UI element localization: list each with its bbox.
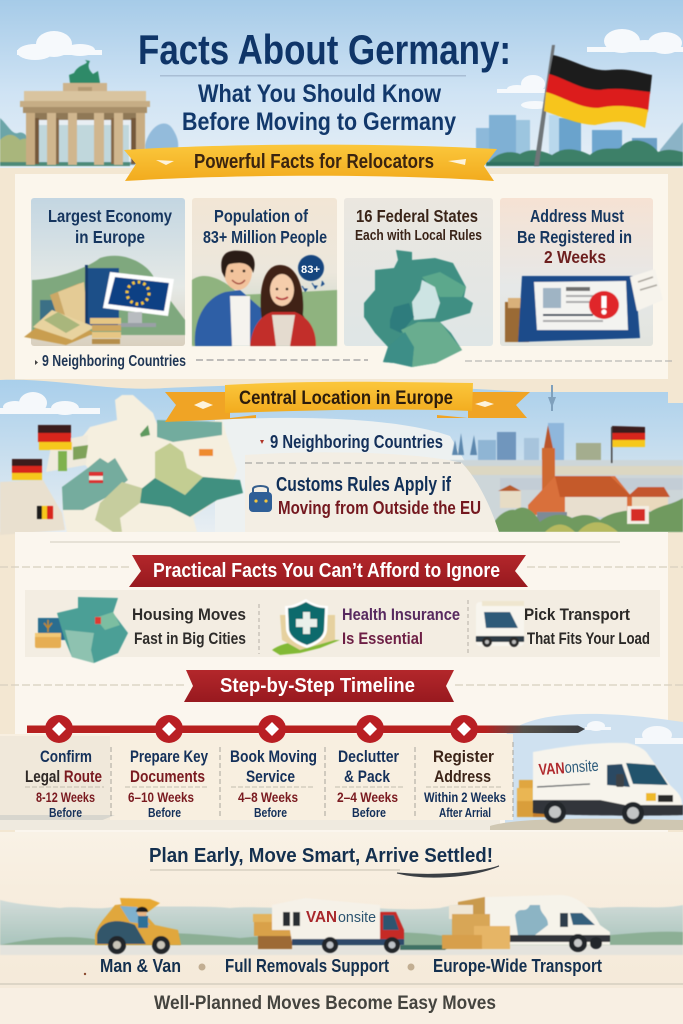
panel: federal states: Each with Local Rules [355, 228, 482, 244]
icon: map and box [35, 597, 128, 663]
panel: population [192, 198, 337, 346]
panel: population: 83+ [301, 264, 320, 276]
step: register address: Register [433, 747, 494, 766]
title: Facts About Germany: [138, 26, 511, 73]
footer landscape [0, 900, 683, 955]
step: register address: Address [434, 767, 491, 786]
title: What You Should Know [198, 80, 441, 108]
step: prepare key documents: Documents [130, 767, 205, 786]
note: 9 neighboring countries [35, 353, 675, 370]
text: central location facts: 9 Neighboring Countries [270, 431, 443, 452]
icon: VANonsite van [533, 743, 683, 824]
step markers [45, 715, 478, 743]
paper shape lower [245, 452, 499, 532]
step: book moving service [230, 747, 317, 820]
cloud left [17, 31, 102, 60]
banner: Step-by-Step Timeline [184, 670, 454, 702]
icon: Brandenburg Gate [20, 60, 150, 165]
icon: boxes and white van [442, 895, 610, 952]
banner: Practical Facts [129, 555, 528, 587]
step: confirm legal route: Before [49, 805, 82, 820]
icon: man and van vehicle [95, 898, 181, 954]
map: Germany states [364, 250, 473, 367]
footer services [84, 956, 602, 976]
icon: padlock [249, 486, 272, 512]
fact: transport: Pick Transport [524, 605, 630, 624]
banner: Powerful Facts for Relocators: Powerful Facts for Relocators [194, 151, 434, 173]
tower silhouette [548, 385, 556, 411]
panel: address registration [500, 198, 663, 346]
icon: shield [272, 599, 340, 655]
panel: central location [0, 380, 683, 540]
step: book moving service: Book Moving [230, 747, 317, 766]
fact: transport: That Fits Your Load [527, 629, 650, 648]
step: confirm legal route: Confirm [40, 747, 92, 766]
icon: red VAN onsite truck: VAN [306, 909, 337, 926]
panel: largest economy: Largest Economy [48, 206, 172, 226]
step: declutter and pack: 2–4 Weeks [337, 789, 398, 805]
illustration: money and EU screen [24, 256, 185, 345]
footer services: Man & Van [100, 956, 181, 976]
flags on map [12, 425, 649, 524]
step: confirm legal route: Legal Route [25, 767, 102, 786]
fact: transport [476, 601, 650, 648]
panel: address registration: 2 Weeks [544, 247, 606, 267]
panel: federal states [344, 198, 493, 367]
fact: health insurance [272, 599, 460, 655]
title: Before Moving to Germany [182, 108, 456, 136]
step: prepare key documents: Before [148, 805, 181, 820]
step: declutter and pack: Before [352, 805, 386, 820]
footer services: Europe-Wide Transport [433, 956, 602, 976]
panel: largest economy [24, 198, 185, 346]
ground under van [490, 819, 683, 830]
fact: housing [35, 597, 246, 663]
tagline [149, 844, 499, 877]
step: prepare key documents: Prepare Key [130, 747, 208, 766]
fact: housing: Housing Moves [132, 605, 246, 624]
band: practical facts [25, 590, 660, 657]
step: confirm legal route [25, 747, 102, 820]
cloud [0, 392, 100, 415]
quadriga [69, 60, 100, 83]
step: book moving service: 4–8 Weeks [238, 789, 298, 805]
icon: red VAN onsite truck [253, 898, 404, 953]
banner: Central Location in Europe: Central Location in Europe [239, 387, 453, 409]
banner: Practical Facts: Practical Facts You Can’t Afford to Ignore [153, 559, 500, 582]
header sky [0, 0, 683, 168]
step: book moving service: Before [254, 805, 287, 820]
step: prepare key documents: 6–10 Weeks [128, 789, 194, 805]
illustration: registration form [505, 269, 663, 342]
separators [111, 742, 513, 817]
city skyline and trees [0, 115, 683, 166]
text: central location facts [245, 431, 481, 518]
step: register address: After Arrial [439, 806, 491, 820]
band: timeline columns [0, 734, 513, 820]
panel: address registration: Be Registered in [517, 227, 632, 247]
fact: housing: Fast in Big Cities [134, 629, 246, 648]
step: book moving service: Service [246, 767, 295, 786]
text: central location facts: Customs Rules Apply if [276, 474, 451, 496]
note: 9 neighboring countries: 9 Neighboring Countries [42, 353, 186, 370]
fact: health insurance: Is Essential [342, 629, 423, 648]
closing line: Well-Planned Moves Become Easy Moves [154, 993, 496, 1014]
fact: health insurance: Health Insurance [342, 605, 460, 624]
clouds [585, 721, 683, 744]
icon: VANonsite van: VAN [538, 760, 565, 779]
step: register address [424, 747, 506, 820]
step: declutter and pack: Declutter [338, 747, 399, 766]
paper panel lower [15, 532, 668, 832]
step: register address: Within 2 Weeks [424, 789, 506, 805]
map: Germany and neighbours [0, 395, 243, 540]
panel: largest economy: in Europe [75, 227, 145, 247]
panel: address registration: Address Must [530, 206, 624, 226]
cloud right [587, 29, 683, 54]
paper shape upper [215, 418, 497, 532]
icon: small van [476, 601, 524, 647]
icon: VANonsite van: onsite [564, 758, 599, 777]
step: declutter and pack: & Pack [344, 767, 390, 786]
tagline: Plan Early, Move Smart, Arrive Settled! [149, 844, 493, 867]
icon: boxes beside van [517, 780, 547, 817]
icon: red VAN onsite truck: onsite [338, 909, 376, 926]
footer services: Full Removals Support [225, 956, 389, 976]
background: timeline sky [505, 714, 683, 830]
paper panel [15, 174, 668, 379]
icon: German flag [534, 45, 652, 166]
panel: population: 83+ Million People [203, 227, 327, 247]
banner: Step-by-Step Timeline: Step-by-Step Timeline [220, 674, 415, 697]
step: prepare key documents [128, 747, 208, 820]
banner: Powerful Facts for Relocators [124, 145, 497, 181]
text: central location facts: Moving from Outside the EU [278, 498, 481, 518]
title [138, 26, 511, 136]
illustration: couple [192, 251, 337, 346]
cloud middle [497, 75, 549, 109]
timeline bar [27, 715, 585, 743]
footer background [0, 832, 683, 1024]
banner: Central Location in Europe [165, 382, 530, 422]
dashed fold lines [0, 567, 683, 685]
step: confirm legal route: 8-12 Weeks [36, 789, 95, 805]
panel: population: Population of [214, 206, 308, 226]
panel: federal states: 16 Federal States [356, 206, 478, 226]
city: right skyline [450, 423, 683, 532]
step: declutter and pack [337, 747, 399, 820]
